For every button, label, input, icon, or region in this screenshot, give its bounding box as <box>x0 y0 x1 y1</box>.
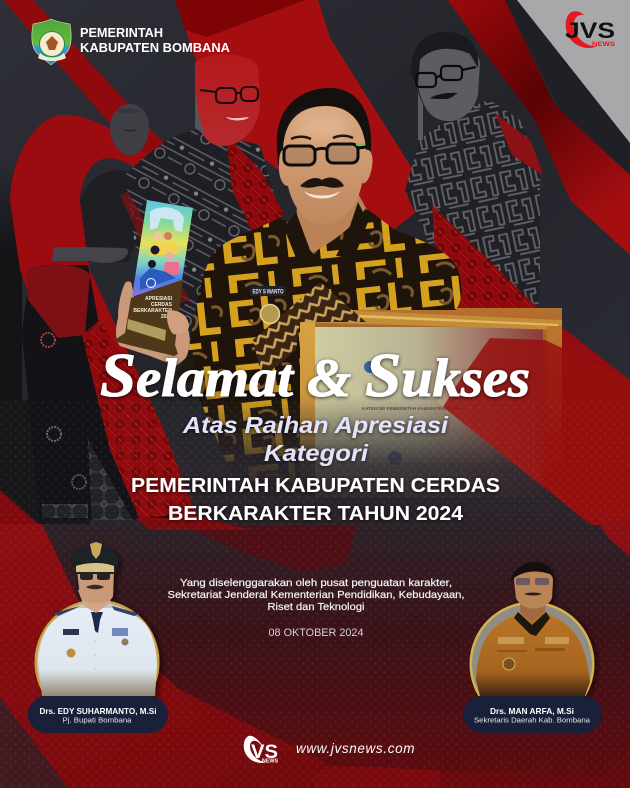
logo: JVS News footer: NEWS <box>262 758 279 764</box>
subtitle: appreciation line: Kategori <box>264 440 369 466</box>
red band translucent over certificate <box>443 338 630 560</box>
heading: award category: PEMERINTAH KABUPATEN CERDAS <box>131 474 500 497</box>
moustache <box>300 178 344 188</box>
photo: woman in the background <box>22 104 200 520</box>
label: Man Arfa: Drs. MAN ARFA, M.Si <box>490 706 574 716</box>
portrait: Man Arfa <box>470 562 600 698</box>
text block: organizer description: Riset dan Teknologi <box>268 602 364 613</box>
heading: government name: PEMERINTAH <box>80 26 163 40</box>
certificate: emblem top <box>364 361 376 373</box>
label: Man Arfa: Sekretaris Daerah Kab. Bombana <box>474 718 590 724</box>
forehead highlight <box>296 115 348 141</box>
collar <box>284 202 368 264</box>
heading: government name: KABUPATEN BOMBANA <box>80 41 230 55</box>
trophy: brown base <box>113 280 183 356</box>
shirt <box>186 205 462 495</box>
badge <box>260 304 280 324</box>
trophy: engraved text: APRESIASI <box>145 296 173 302</box>
trophy: cartoon figures <box>140 207 184 290</box>
logo: JVS News top right: JVS <box>565 18 615 43</box>
label: Edy Suharmanto: Pj. Bupati Bombana <box>62 718 132 724</box>
title: Selamat & Sukses: Selamat & Sukses <box>100 342 530 410</box>
thumb <box>167 310 189 335</box>
label: Man Arfa <box>463 696 602 733</box>
lower panel: dark red background <box>0 520 630 788</box>
corner: grey triangle top right <box>517 0 630 143</box>
face <box>279 106 373 225</box>
label: Edy Suharmanto <box>28 696 168 733</box>
photo: red batik sleeve on the right <box>432 205 545 325</box>
trophy <box>113 200 193 356</box>
text block: organizer description: Sekretariat Jenderal Kementerian Pendidikan, Kebudayaan, <box>168 590 464 601</box>
heading: award category <box>131 474 500 525</box>
trophy: engraved text: BERKARAKTER <box>133 308 172 314</box>
trophy: engraved text: CERDAS <box>151 302 173 308</box>
logo: JVS News footer <box>244 736 279 764</box>
logo: JVS News footer: VS <box>251 742 278 763</box>
hand holding trophy <box>116 281 190 366</box>
shirt chevron placket <box>253 282 366 378</box>
photo: main man holding trophy <box>116 88 462 495</box>
name tag: EDY S MANTO <box>252 290 284 296</box>
heading: award category: BERKARAKTER TAHUN 2024 <box>168 502 464 525</box>
portrait: Edy Suharmanto <box>34 542 164 698</box>
subtitle: appreciation line: Atas Raihan Apresiasi <box>182 412 449 438</box>
glasses <box>284 144 366 165</box>
date: 08 OKTOBER 2024 <box>268 627 364 639</box>
dot texture overlay <box>0 400 630 788</box>
smile <box>304 191 340 198</box>
text block: organizer description <box>168 578 464 613</box>
label: Edy Suharmanto: Drs. EDY SUHARMANTO, M.Si <box>40 706 156 716</box>
background: upper dark panel with red ribbons <box>0 0 630 560</box>
neck <box>297 188 366 255</box>
certificate: category caption: KATEGORI PEMERINTAH KABUPATEN CERDAS <box>362 406 465 411</box>
overlay: fade into lower dark panel <box>150 395 610 540</box>
photo: man with round glasses in the background <box>120 54 285 340</box>
logo: JVS News top right <box>565 11 616 48</box>
trophy: engraved text <box>133 296 173 320</box>
subtitle: appreciation line <box>182 412 449 466</box>
red left corner at lower panel <box>135 518 250 530</box>
photo: certificate frame <box>296 308 562 497</box>
hair back <box>277 88 371 165</box>
footer website: www.jvsnews.com <box>296 741 415 756</box>
logo: JVS News top right: NEWS <box>592 41 616 48</box>
text block: organizer description: Yang diselenggarakan oleh pusat penguatan karakter, <box>180 578 452 589</box>
shirt cuff <box>176 350 198 384</box>
name tag <box>250 286 286 296</box>
heading: government name <box>80 26 230 55</box>
trophy: engraved text: 2024 <box>161 314 172 320</box>
photo: man with glasses at the right background <box>405 32 542 320</box>
logo: Kabupaten Bombana shield <box>32 19 71 65</box>
